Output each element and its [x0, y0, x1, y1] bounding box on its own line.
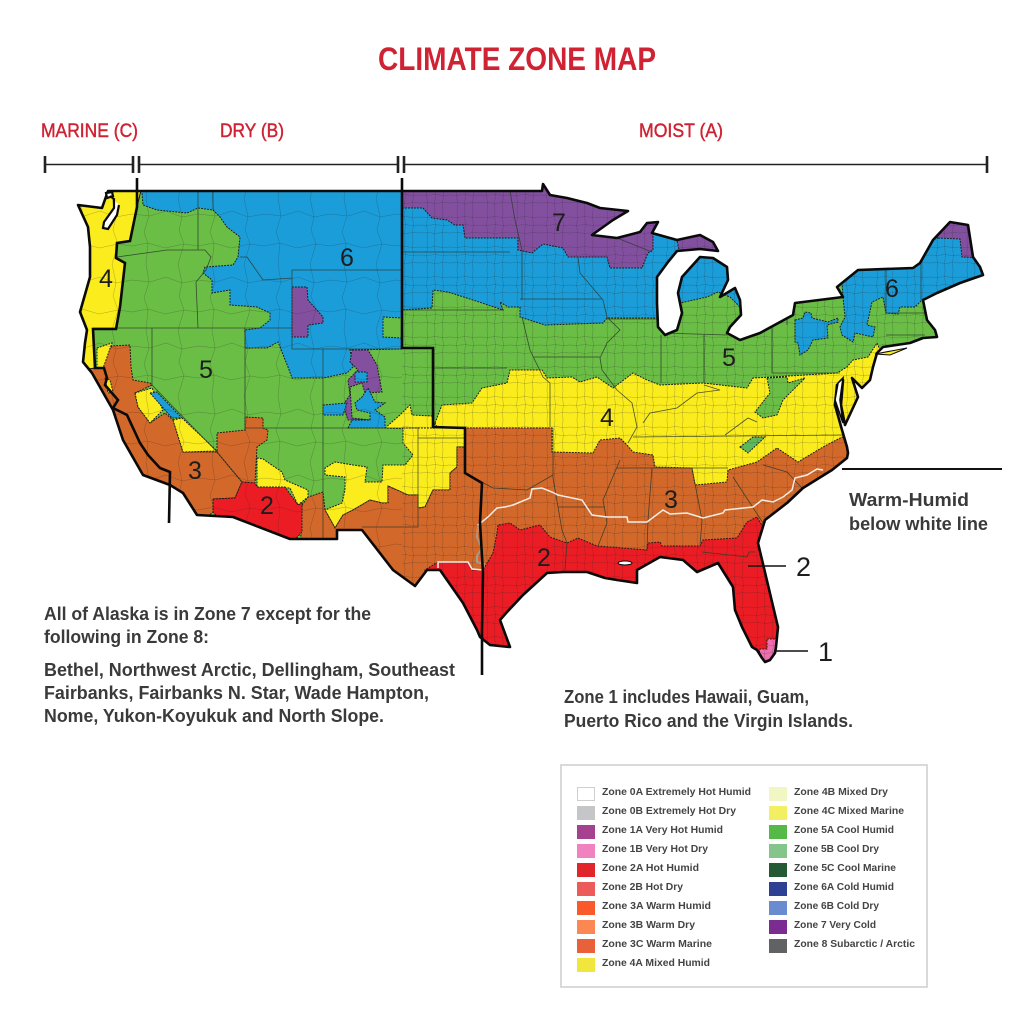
zone numbers on the map: 2 — [260, 492, 274, 520]
legend column 1: Zone 2A Hot Humid — [602, 863, 699, 874]
zone 2 red Arizona — [213, 482, 302, 545]
legend column 2: Zone 4B Mixed Dry — [794, 787, 888, 798]
zone 4 yellow southern California — [135, 388, 163, 423]
zone 4 yellow coastal California spot — [105, 378, 113, 393]
climate category range rulers — [45, 156, 987, 173]
callout: zone 1 south Florida — [775, 637, 833, 667]
zone 7 purple upper Michigan — [676, 236, 716, 250]
climate category labels: MOIST (A) — [639, 120, 723, 142]
us outline — [78, 184, 983, 662]
legend column 1: Zone 0A Extremely Hot Humid — [602, 787, 751, 798]
zone numbers on the map: 3 — [664, 486, 678, 514]
Lake Pontchartrain — [618, 561, 632, 565]
legend column 1: Zone 3B Warm Dry — [602, 920, 695, 931]
zone numbers on the map — [99, 209, 899, 572]
zone numbers on the map: 5 — [722, 344, 736, 372]
legend column 2: Zone 5C Cool Marine — [794, 863, 896, 874]
thick marine-dry boundary — [93, 178, 170, 523]
zone numbers on the map: 5 — [199, 356, 213, 384]
zone numbers on the map: 7 — [552, 209, 566, 237]
legend column 1: Zone 0B Extremely Hot Dry — [602, 806, 736, 817]
legend column 1: Zone 3A Warm Humid — [602, 901, 711, 912]
text block: Alaska note: Nome, Yukon-Koyukuk and North Slope. — [44, 706, 384, 726]
text block: Zone 1 note: Puerto Rico and the Virgin Islands. — [564, 711, 853, 731]
callout: warm-humid note — [842, 469, 1002, 534]
title: CLIMATE ZONE MAP — [378, 41, 656, 77]
zone 6 blue northeast — [840, 238, 982, 343]
zone 6 blue strip — [150, 392, 182, 418]
zone numbers on the map: 6 — [885, 275, 899, 303]
climate category labels: MARINE (C) — [41, 120, 138, 142]
text block: Zone 1 note — [564, 687, 853, 731]
zone 7 purple Colorado — [343, 350, 382, 420]
zone 4 yellow Colorado and Kansas — [385, 405, 436, 430]
Puget Sound — [103, 192, 119, 229]
callout: warm-humid note: below white line — [849, 514, 988, 534]
legend column 1 — [577, 787, 751, 972]
zone 7 purple Maine — [935, 223, 972, 258]
zone 2 red gulf coast — [424, 516, 777, 651]
zone 4 yellow New Mexico and Oklahoma — [325, 428, 465, 528]
legend column 1: Zone 1A Very Hot Humid — [602, 825, 723, 836]
zone 6 blue midwest — [403, 208, 740, 326]
text block: Alaska note: All of Alaska is in Zone 7 except for the — [44, 604, 371, 624]
Chesapeake Bay — [835, 378, 843, 423]
legend column 2: Zone 5A Cool Humid — [794, 825, 894, 836]
legend column 2: Zone 4C Mixed Marine — [794, 806, 904, 817]
climate category labels: DRY (B) — [220, 120, 284, 142]
legend column 2: Zone 8 Subarctic / Arctic — [794, 939, 915, 950]
text block: Alaska note: Bethel, Northwest Arctic, Dellingham, Southeast — [44, 660, 455, 680]
legend column 1: Zone 1B Very Hot Dry — [602, 844, 708, 855]
text block: Zone 1 note: Zone 1 includes Hawaii, Guam, — [564, 687, 809, 707]
zone 6 blue west — [137, 185, 402, 378]
legend column 1: Zone 3C Warm Marine — [602, 939, 712, 950]
legend — [561, 765, 927, 987]
zone 4 yellow Utah and Arizona — [257, 458, 308, 505]
legend column 2: Zone 6A Cold Humid — [794, 882, 894, 893]
state boundary lines — [93, 191, 925, 570]
zone 3 orange California — [90, 344, 242, 514]
legend column 2: Zone 6B Cold Dry — [794, 901, 879, 912]
climate category labels — [41, 120, 723, 142]
white warm-humid boundary line — [438, 469, 823, 570]
zone numbers on the map: 4 — [600, 404, 614, 432]
text block: Alaska note — [44, 604, 455, 726]
zone 7 purple Wyoming — [292, 287, 323, 337]
zone 6 blue New York patch — [795, 312, 838, 355]
legend column 2: Zone 7 Very Cold — [794, 920, 876, 931]
zone 4 yellow marine coast — [80, 192, 141, 370]
zone 3 orange south — [300, 428, 847, 584]
callout: warm-humid note: Warm-Humid — [849, 490, 969, 510]
zone 1 pink south Florida — [759, 638, 776, 660]
legend column 2: Zone 5B Cool Dry — [794, 844, 879, 855]
map: US climate zones — [60, 170, 1002, 700]
zone 5 green West Virginia — [755, 377, 805, 418]
text block: Alaska note: Fairbanks, Fairbanks N. Star, Wade Hampton, — [44, 683, 429, 703]
legend column 1: Zone 2B Hot Dry — [602, 882, 683, 893]
callout: zone 2 Florida — [748, 552, 811, 582]
Long Island — [875, 348, 907, 355]
zone numbers on the map: 3 — [188, 457, 202, 485]
callout: zone 2 Florida: 2 — [796, 552, 811, 582]
zone 5 green Tennessee — [740, 437, 765, 453]
zone 6 blue Colorado patches — [348, 388, 385, 428]
zone 5 green Wyoming patch — [383, 317, 402, 338]
zone numbers on the map: 4 — [99, 265, 113, 293]
zone 3 orange Arizona north — [217, 417, 268, 483]
zone 4 yellow northern California inland — [97, 343, 112, 368]
zone numbers on the map: 2 — [537, 544, 551, 572]
grey section of warm-humid line on the Texas boundary — [477, 525, 484, 570]
zone 4 yellow band — [434, 343, 880, 485]
county line texture west — [81, 192, 402, 550]
county line texture east — [402, 192, 976, 660]
zone 7 purple north — [403, 188, 656, 268]
text block: Alaska note: following in Zone 8: — [44, 627, 209, 647]
legend column 1: Zone 4A Mixed Humid — [602, 958, 710, 969]
callout: zone 1 south Florida: 1 — [818, 637, 833, 667]
zone 4 yellow Mojave triangle — [173, 418, 217, 452]
thick dry-moist boundary — [402, 178, 483, 675]
zones clipped to US outline — [80, 188, 982, 660]
zone numbers on the map: 6 — [340, 244, 354, 272]
legend column 2 — [769, 787, 915, 953]
